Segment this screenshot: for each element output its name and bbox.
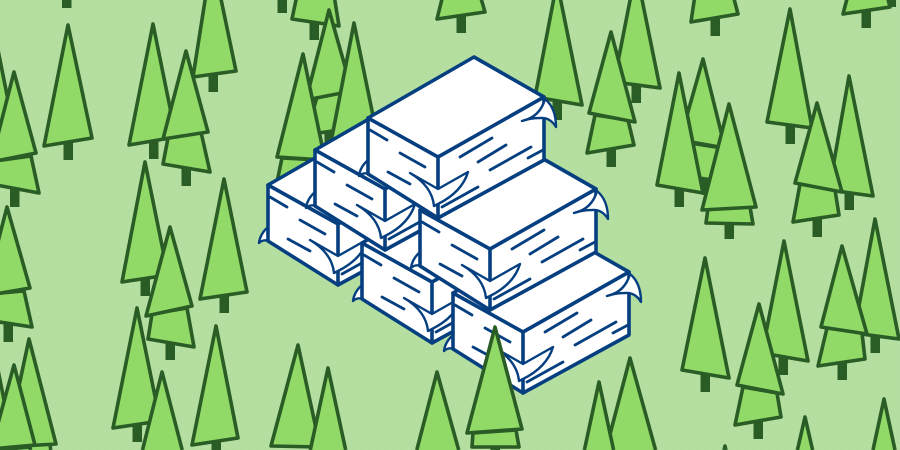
tree: single, x705 (682, 258, 729, 392)
tree: tip, x805 bottom (797, 417, 813, 450)
paper bundle: top (359, 57, 556, 218)
tree: two tier, bottom left front (0, 365, 35, 450)
tree: single, x557 (535, 0, 582, 120)
tree: single, x849 (829, 76, 873, 210)
paper bundle: lower left (259, 124, 456, 285)
tree: x599, bottom (584, 382, 614, 450)
tree: two tier, left edge (0, 207, 32, 342)
tree: single, x68 (44, 25, 92, 160)
tree: single, x790 (767, 9, 812, 144)
tree: single, x679 (657, 73, 703, 207)
tree: two tier, x186 (163, 51, 210, 186)
tree: two tier, far left (0, 72, 39, 207)
tree trunk: top centre left (278, 0, 287, 13)
tree trunk: top left (62, 0, 72, 8)
tree: tip, x725 bottom (724, 446, 726, 450)
paper bundle: lower middle (353, 182, 550, 343)
tree: single, x224 (200, 179, 247, 313)
tree: edge sliver, bottom left (0, 365, 14, 450)
tree: two tier, x842 (818, 246, 867, 380)
tree: two tier, x329 behind bundles (306, 10, 352, 145)
tree: two tier, x759 (735, 304, 783, 439)
paper bundle: middle right (411, 149, 608, 310)
tree: single, x137 (113, 308, 160, 442)
paper bundle: lower right (444, 232, 641, 393)
tree: single, x145 (122, 162, 168, 296)
tree: x328, bottom (310, 368, 346, 450)
tree: x216, bottom (192, 326, 238, 450)
tree: single, x875 (854, 219, 899, 353)
tree: x437, bottom (417, 372, 459, 450)
tree: single, x153 (129, 24, 176, 159)
tree: single, x213 (193, 0, 236, 92)
tree: x630, bottom (606, 358, 656, 450)
tree: x162, cut by page bottom (142, 372, 182, 450)
tree: top, x866 (843, 0, 890, 28)
tree: single, far left (0, 40, 20, 160)
tree: two tier, x703 behind (680, 59, 728, 195)
tree: tip, x884 bottom (873, 399, 895, 450)
tree: top, x316 (292, 0, 339, 40)
tree: x298, bottom (271, 345, 320, 447)
tree: single, x636 (614, 0, 660, 103)
tree: two tier, foreground x495 (467, 327, 522, 450)
tree: two tier, x303 behind bundles (277, 54, 325, 190)
tree: two tier, x817 (793, 103, 842, 237)
tree: two tier, x729 (702, 104, 756, 239)
tree: top, x461 (437, 0, 485, 33)
tree: two tier, x611 (587, 32, 635, 167)
tree: two tier, bottom left back (6, 339, 56, 450)
paper bundle: middle left (306, 89, 503, 250)
tree: top, x715 (691, 0, 738, 36)
tree: single, x354 behind bundles (331, 23, 378, 142)
tree: two tier, x170 (146, 227, 194, 360)
tree: single, x784 (762, 241, 808, 375)
tree trunk: top right edge (888, 0, 896, 7)
